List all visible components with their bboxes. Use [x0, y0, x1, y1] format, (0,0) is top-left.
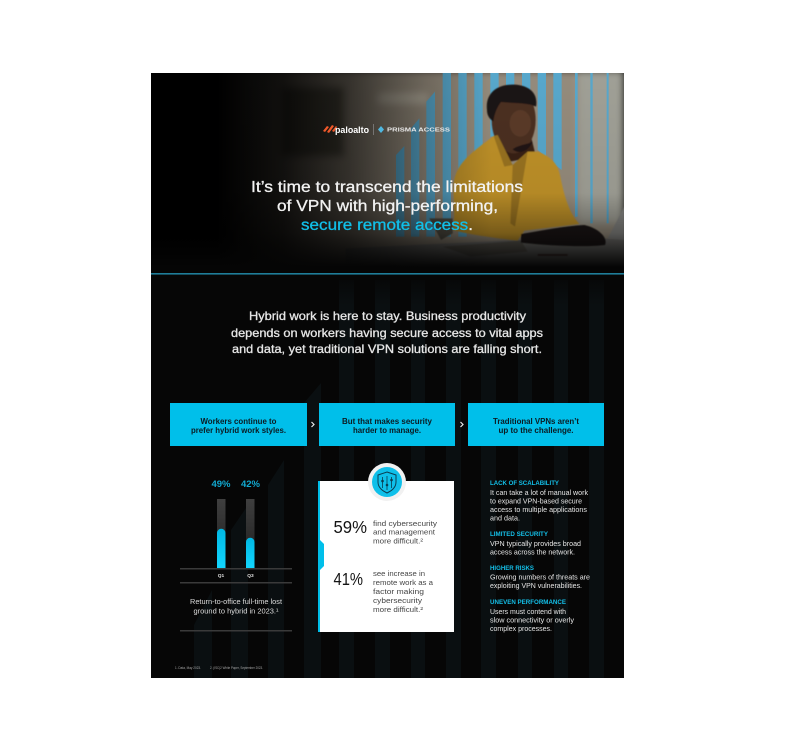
item: lack of scalability: to expand VPN-based secure [490, 496, 582, 506]
person [453, 85, 624, 246]
stat 41%: see increase in [373, 569, 425, 578]
item: lack of scalability: It can take a lot of manual work [490, 488, 588, 497]
item: limited security: VPN typically provides broad [490, 539, 581, 548]
page panel background [151, 73, 624, 678]
value labels: 49% [211, 479, 231, 490]
item: uneven performance: slow connectivity or overly [490, 616, 574, 624]
header box: hybrid work [170, 403, 307, 446]
header box: security: But that makes security [342, 417, 433, 426]
item: lack of scalability: LACK OF SCALABILITY [490, 481, 559, 487]
item: lack of scalability: access to multiple applications [490, 505, 587, 514]
panel: white stat card [318, 481, 454, 632]
header box: hybrid work: prefer hybrid work styles. [191, 426, 286, 435]
cyan light stripes [396, 70, 609, 237]
arrow [312, 422, 314, 427]
item: higher risks [490, 566, 590, 590]
item: uneven performance [490, 600, 574, 633]
intro text: Hybrid work is here to stay. Business productivity [249, 309, 526, 323]
item: limited security: access across the network. [490, 548, 575, 556]
stat 41% [334, 569, 434, 614]
chart caption [190, 597, 283, 616]
item: uneven performance: complex processes. [490, 624, 552, 633]
stat 59%: 59% [334, 517, 367, 537]
hero photo [268, 73, 624, 262]
item: higher risks: HIGHER RISKS [490, 566, 534, 572]
chart caption: Return-to-office full-time lost [190, 597, 283, 606]
arrow [460, 422, 463, 427]
header box: security [319, 403, 455, 446]
stat 41%: cybersecurity [373, 596, 422, 605]
icon: palo alto mark [323, 125, 337, 133]
background pattern [194, 280, 604, 678]
footnotes: 2. (ISC)2 White Paper, September 2023. [210, 666, 263, 670]
infographic [151, 73, 624, 678]
item: limited security: LIMITED SECURITY [490, 532, 548, 538]
header box: VPNs: Traditional VPNs aren’t [493, 417, 579, 426]
bar Q1 [217, 499, 226, 568]
header box: VPNs: up to the challenge. [498, 426, 574, 435]
intro text: and data, yet traditional VPN solutions are falling short. [232, 342, 542, 356]
bar Q3 [246, 499, 254, 568]
desk [419, 218, 624, 256]
footnotes [175, 666, 263, 670]
item: uneven performance: UNEVEN PERFORMANCE [490, 600, 566, 606]
bar chart: Q3 [247, 573, 254, 579]
item: higher risks: Growing numbers of threats are [490, 572, 590, 582]
title [251, 179, 523, 234]
header box: hybrid work: Workers continue to [200, 417, 277, 426]
palo alto wordmark: paloalto [335, 125, 369, 136]
stat 59%: find cybersecurity [373, 519, 437, 528]
bar chart [180, 479, 292, 584]
stat 59%: more difficult.² [373, 536, 424, 546]
item: lack of scalability [490, 481, 588, 522]
stat 41%: remote work as a [373, 578, 434, 587]
stat 59%: and management [373, 528, 436, 536]
item: lack of scalability: and data. [490, 514, 520, 522]
stat 41%: 41% [334, 569, 363, 589]
title: It’s time to transcend the limitations [251, 179, 523, 196]
list: VPN challenges [490, 481, 590, 633]
icon: prisma diamond [378, 126, 384, 133]
item: higher risks: exploiting VPN vulnerabilities. [490, 581, 582, 590]
footnotes: 1. Data, May 2023. [175, 666, 201, 670]
chart caption: ground to hybrid in 2023.¹ [194, 606, 279, 616]
header box: VPNs [468, 403, 604, 446]
logo lockup [323, 124, 451, 136]
bar chart: 42% [241, 479, 261, 490]
title: secure remote access . [301, 217, 473, 234]
hero shading [151, 73, 482, 264]
title: of VPN with high-performing, [277, 198, 498, 215]
photo backdrop [247, 73, 624, 258]
item: limited security [490, 532, 581, 556]
prisma access wordmark: PRISMA ACCESS [387, 128, 451, 134]
icon: security shield badge [368, 463, 406, 501]
stat 41%: more difficult.² [373, 605, 424, 614]
stat 59% [334, 517, 437, 546]
stat 41%: factor making [373, 587, 424, 596]
intro text: depends on workers having secure access to vital apps [231, 326, 543, 340]
intro text [231, 309, 543, 356]
item: uneven performance: Users must contend with [490, 607, 566, 616]
divider line [151, 273, 624, 275]
axis labels: Q1 [218, 573, 225, 579]
header box: security: harder to manage. [353, 426, 421, 435]
